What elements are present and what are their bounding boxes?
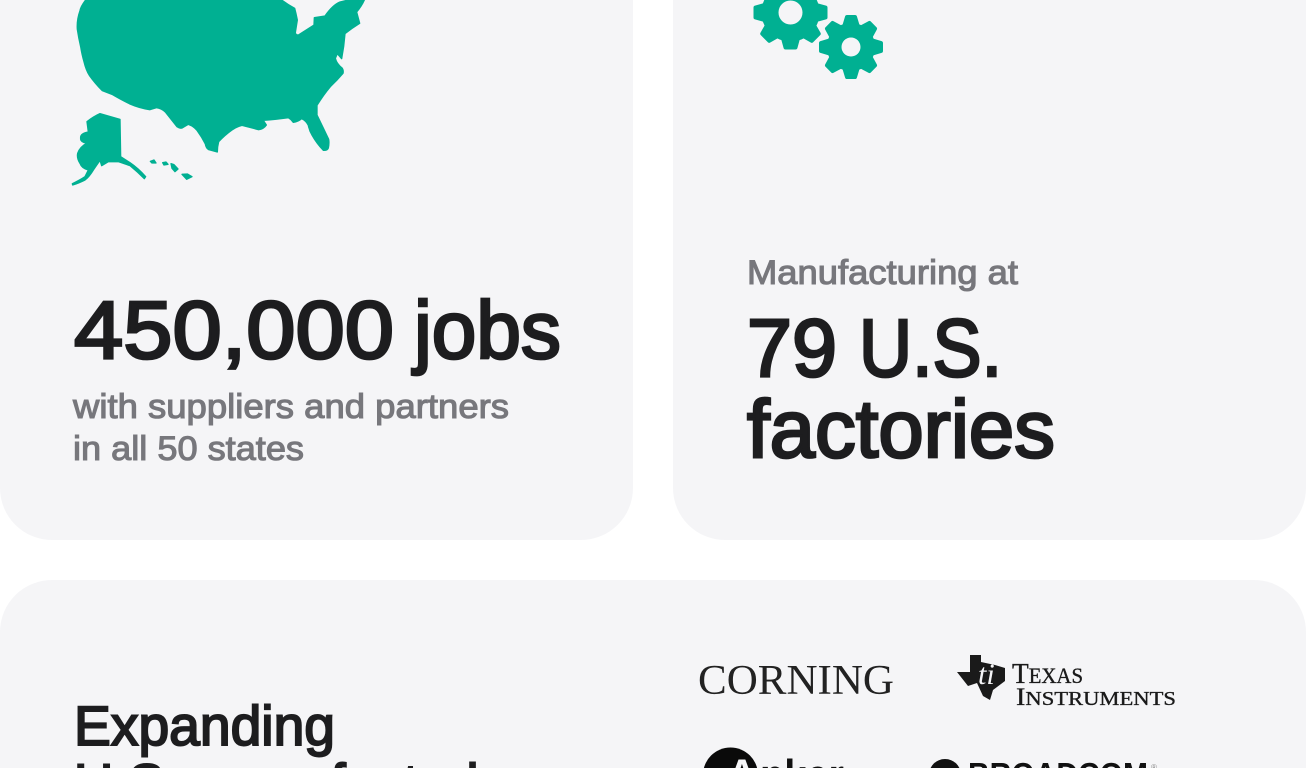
logo: Texas Instruments	[957, 655, 1176, 711]
stat: 79 U.S. factories: factories	[747, 384, 1055, 475]
text: Manufacturing at: Manufacturing at	[747, 254, 1019, 292]
panel: expanding U.S. manufacturing	[0, 580, 1306, 768]
panel: factories	[673, 0, 1306, 540]
heading: Expanding U.S. manufacturing	[74, 694, 539, 768]
stat: 450,000 jobs	[74, 285, 561, 376]
text: with suppliers and partners in all 50 states: in all 50 states	[73, 430, 304, 468]
stat: 79 U.S. factories: 79	[747, 303, 837, 394]
icon: Texas outline with ti: ti	[978, 658, 995, 691]
wordmark: Texas Instruments: INSTRUMENTS	[1016, 684, 1176, 711]
wordmark: Texas Instruments	[1012, 658, 1176, 711]
stat: 79 U.S. factories: U.S.	[859, 303, 1002, 394]
text: with suppliers and partners in all 50 states	[72, 388, 509, 468]
logo: Anker	[703, 748, 844, 768]
logo: Corning: CORNING	[698, 658, 894, 704]
icon: Texas outline with ti	[957, 655, 1005, 700]
panel: jobs	[0, 0, 633, 540]
heading: Expanding U.S. manufacturing: Expanding	[74, 694, 335, 757]
stat: 79 U.S. factories	[747, 303, 1055, 475]
stat: 450,000 jobs: jobs	[412, 285, 561, 376]
wordmark: Texas Instruments: TEXAS	[1012, 658, 1083, 690]
icon: map of the United States	[72, 0, 364, 185]
stat: 450,000 jobs: 450,000	[74, 285, 394, 376]
icon: gears	[756, 0, 881, 77]
text: with suppliers and partners in all 50 states: with suppliers and partners	[72, 388, 509, 426]
